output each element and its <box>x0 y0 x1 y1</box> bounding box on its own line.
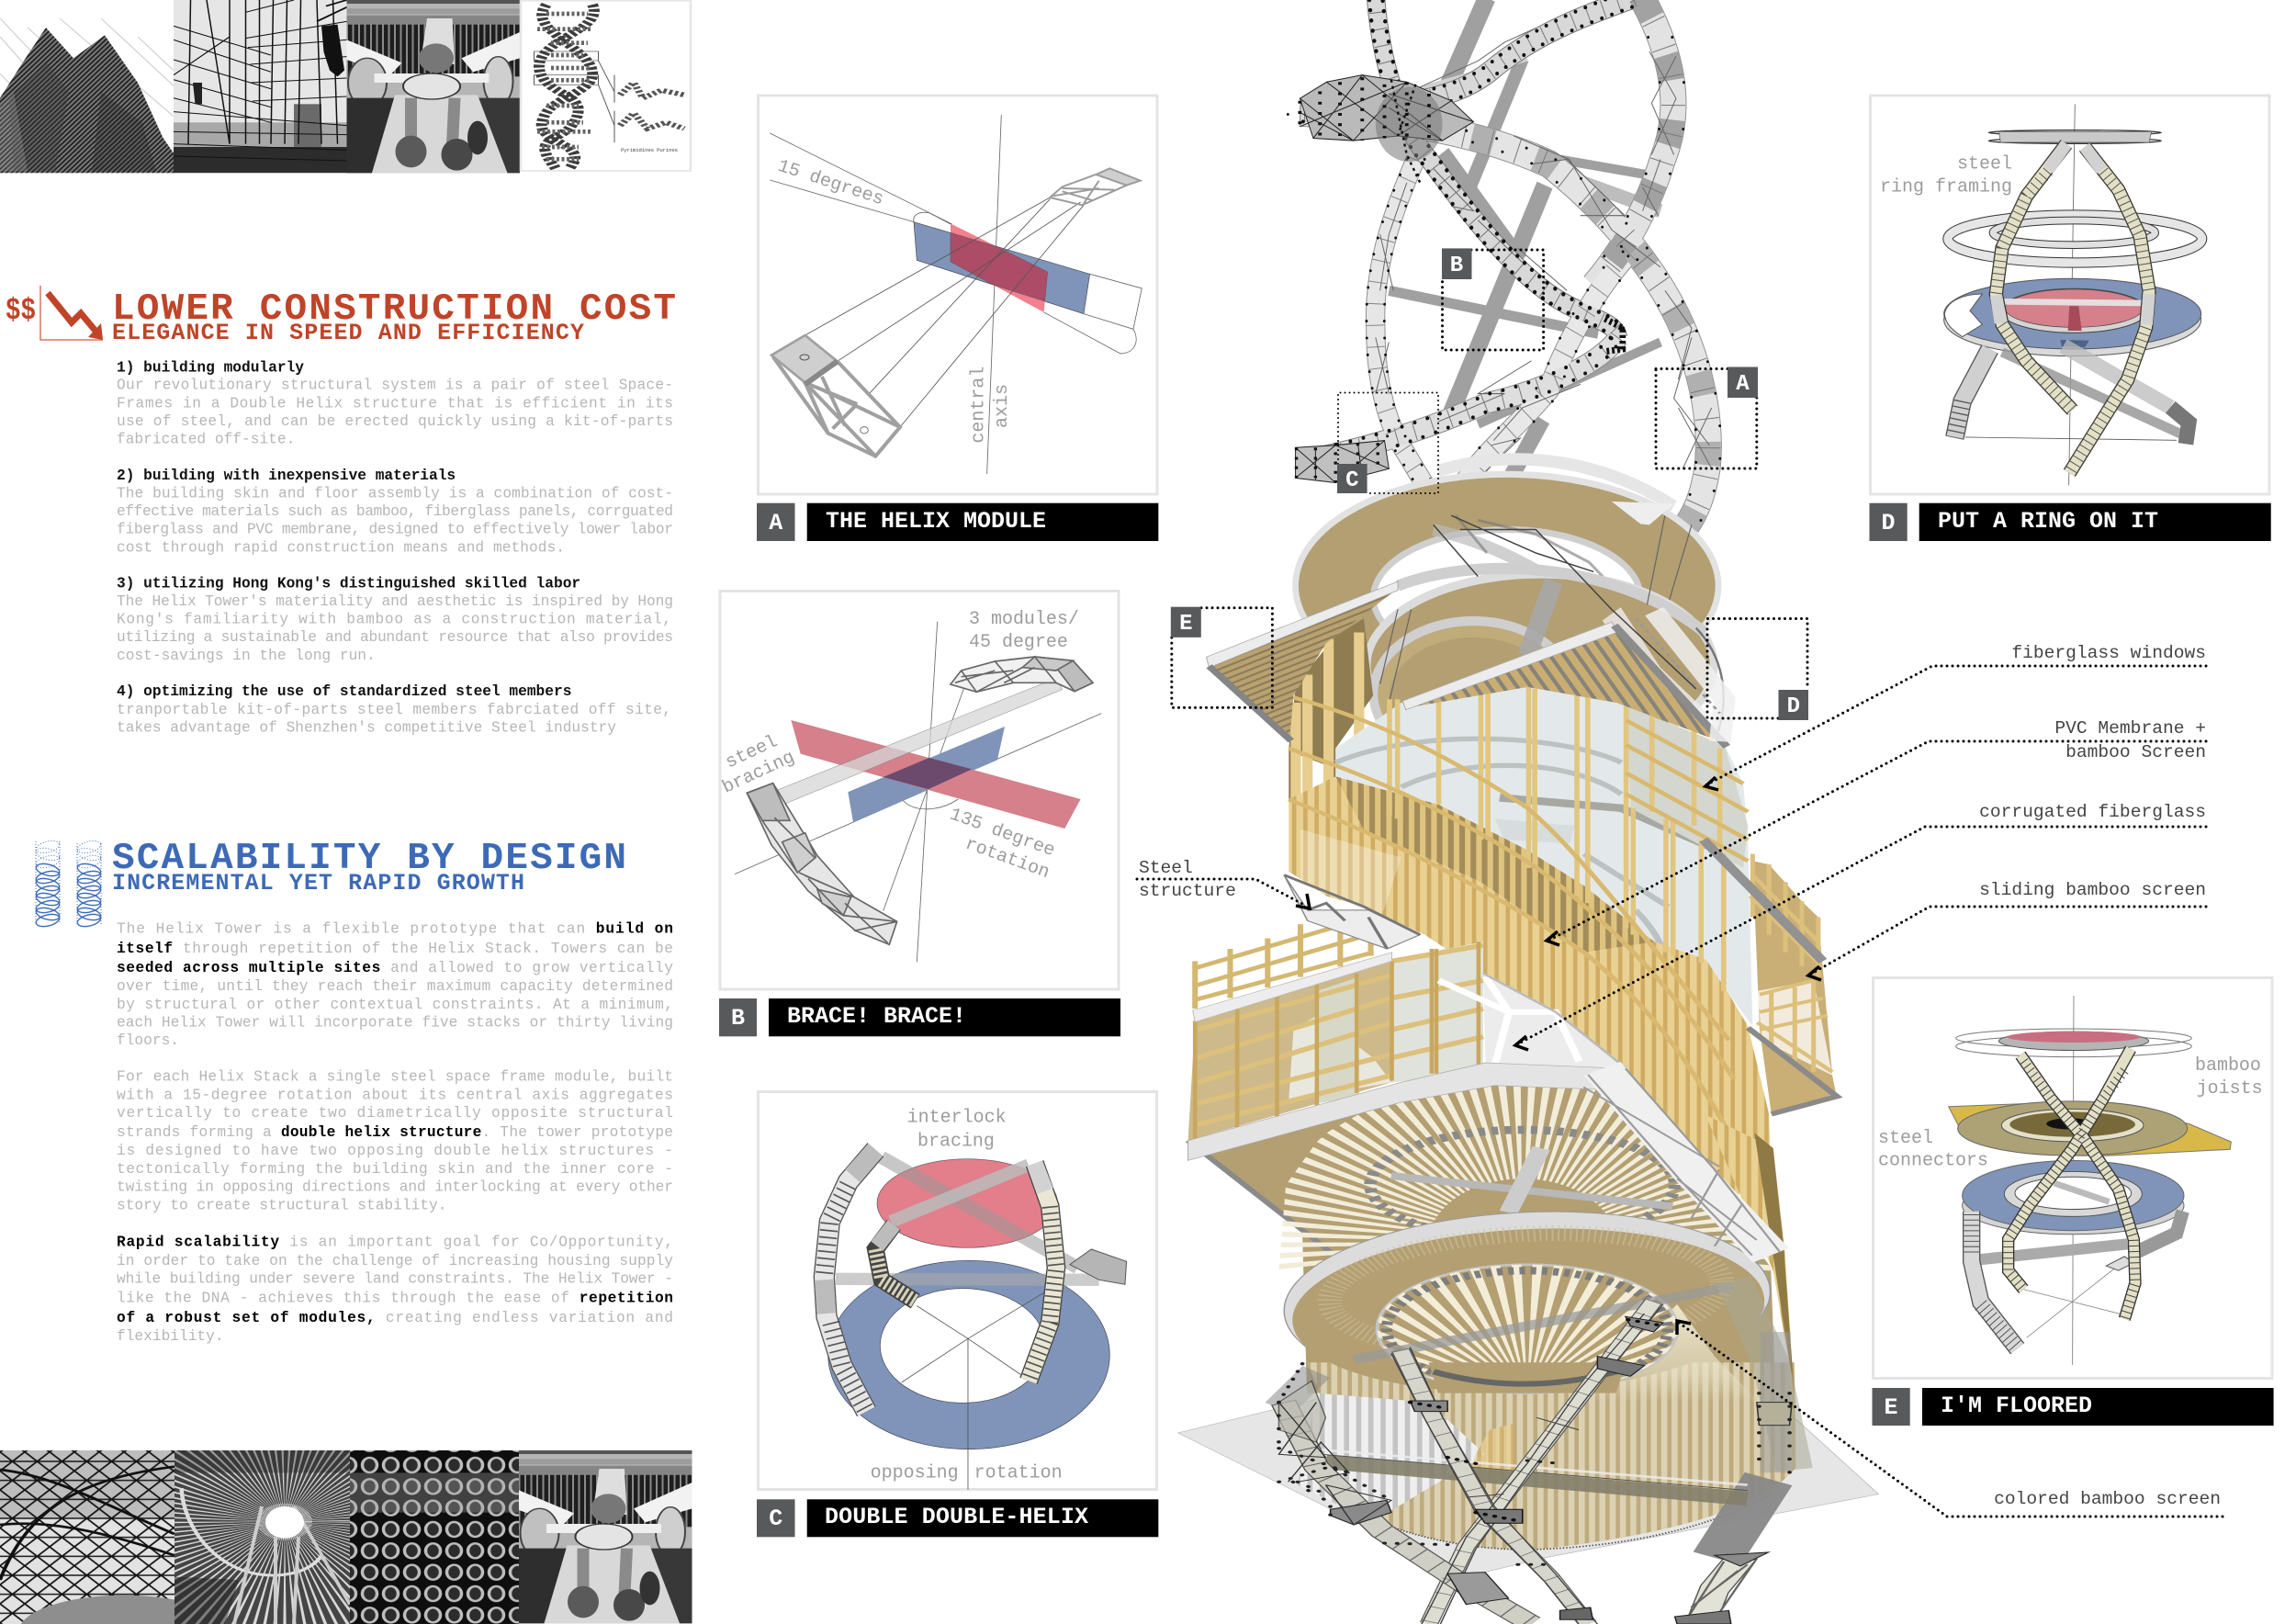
label D: PUT A RING ON IT <box>1938 508 2158 535</box>
callout: colored bamboo screen: colored bamboo screen <box>1994 1489 2221 1509</box>
annotations <box>775 156 1013 444</box>
annotations: joists <box>2197 1078 2263 1100</box>
text block: cost points: 4) optimizing the use of standardized steel members <box>117 683 571 700</box>
tan floor underside <box>1187 1068 1775 1393</box>
steel beams <box>1389 0 1660 480</box>
annotations: steel <box>1878 1128 1933 1149</box>
gray lower strand <box>1972 1212 2183 1348</box>
callout: corrugated fiberglass <box>1515 802 2206 1050</box>
annotations: connectors <box>1878 1150 1988 1171</box>
text block: cost points: utilizing a sustainable and abundant resource that also provides <box>117 629 673 646</box>
label A: THE HELIX MODULE <box>826 508 1046 535</box>
right balcony <box>1704 840 1837 1114</box>
text block: scalability: in order to take on the challenge of increasing housing supply <box>117 1253 673 1269</box>
text block: cost points: use of steel, and can be erected quickly using a kit-of-parts <box>117 413 673 430</box>
photo: steel pipe machinery repeat <box>519 1450 692 1623</box>
bamboo joist floor <box>1949 1101 2231 1156</box>
callout box A: A <box>1736 372 1750 397</box>
blue floor <box>1963 1161 2184 1235</box>
node dots <box>1288 0 1720 571</box>
label C <box>757 1499 1158 1537</box>
white steel truss <box>1583 1068 1780 1256</box>
label E: E <box>1884 1394 1898 1421</box>
text block: cost points: tranportable kit-of-parts steel members fabrciated off site, <box>117 702 671 718</box>
text block: scalability: while building under severe land constraints. The Helix Tower - <box>117 1270 673 1287</box>
annotations: ring framing <box>1880 176 2012 197</box>
text block: cost points: 2) building with inexpensive materials <box>117 468 456 484</box>
annotations <box>1878 1055 2263 1171</box>
text block: scalability: story to create structural stability. <box>117 1198 446 1214</box>
helix strands <box>1300 0 1708 571</box>
annotations: opposing <box>871 1462 959 1483</box>
callout box E <box>1171 607 1272 707</box>
text block: scalability: flexibility. <box>117 1328 224 1345</box>
annotations: rotation <box>974 1462 1063 1483</box>
photo: bamboo dome interior <box>174 1450 350 1624</box>
top photo strip: Pyrimidines Purines <box>621 147 678 153</box>
cream strands <box>1996 144 2149 473</box>
strand: left <box>824 1150 875 1412</box>
bamboo mullions <box>1390 687 1724 991</box>
strand: right <box>1029 1164 1056 1381</box>
balcony floor slab <box>1187 1063 1649 1160</box>
callout: steel structure: structure <box>1139 881 1236 901</box>
text block: scalability: each Helix Tower will incorporate five stacks or thirty living <box>117 1015 673 1032</box>
photo: bamboo scaffold towers <box>0 18 174 173</box>
text block: cost points: Kong's familiarity with bamboo as a construction material, <box>117 612 671 628</box>
second floor opening <box>1352 1263 1735 1394</box>
module: lower truss <box>771 335 900 457</box>
wire bracing <box>1376 28 1712 483</box>
label B: B <box>731 1005 745 1032</box>
back wall <box>1289 618 1373 808</box>
text block: scalability: is designed to have two opposing double helix structures - <box>117 1143 673 1159</box>
tower: main bamboo body and roof plates <box>1188 581 1837 1194</box>
callout box A <box>1656 367 1758 468</box>
text block: scalability: The Helix Tower is a flexible prototype that can build on <box>117 921 673 938</box>
text block: scalability: For each Helix Stack a single steel space frame module, built <box>117 1068 673 1085</box>
annotations: bamboo <box>2195 1055 2261 1077</box>
annotations: 45 degree <box>969 632 1068 653</box>
slat screen <box>1289 776 1772 1194</box>
bamboo curved rails <box>1289 697 1748 1170</box>
heading: lower construction cost: ELEGANCE IN SPEED AND EFFICIENCY <box>112 320 584 346</box>
callout: corrugated fiberglass: corrugated fiberglass <box>1979 802 2206 822</box>
label B: BRACE! BRACE! <box>787 1003 966 1030</box>
text block: scalability: seeded across multiple sites and allowed to grow vertically <box>117 960 673 976</box>
annotations: bracing <box>719 747 798 799</box>
annotations: bracing <box>917 1131 995 1152</box>
top photo strip <box>0 0 691 173</box>
annotations: central <box>969 367 990 444</box>
strand: inner <box>875 1224 916 1302</box>
left balcony <box>1188 875 1626 1141</box>
blue floor ring <box>1944 278 2201 356</box>
heading: scalability by design: SCALABILITY BY DESIGN <box>112 838 626 880</box>
text block: cost points: Frames in a Double Helix structure that is efficient in its <box>117 395 673 412</box>
heading: scalability by design: INCREMENTAL YET RAPID GROWTH <box>112 870 524 897</box>
callout box C <box>1337 393 1438 493</box>
callout box B: B <box>1450 254 1463 278</box>
diagram: floor assembly <box>1878 996 2263 1365</box>
tower: lower floor ribs and drum <box>1187 1063 1796 1624</box>
module blocks and nodes <box>1278 1316 1792 1624</box>
callout box D: D <box>1787 694 1800 719</box>
text block: scalability: of a robust set of modules, creating endless variation and <box>117 1310 673 1326</box>
text block: cost points: cost through rapid construction means and methods. <box>117 539 565 556</box>
lower steel modules <box>1278 1280 1795 1624</box>
text block: scalability <box>117 921 673 1345</box>
module: upper truss <box>1050 168 1141 205</box>
photo: steel pipe machinery <box>347 0 520 173</box>
panel E: I'm floored <box>1874 977 2272 1378</box>
text block: scalability: floors. <box>117 1032 179 1049</box>
cream crossing strands <box>2009 1049 2135 1319</box>
outer radial ribs <box>1349 1124 1696 1362</box>
text block: scalability: Rapid scalability is an important goal for Co/Opportunity, <box>117 1235 673 1251</box>
label A <box>757 503 1158 541</box>
panel D: put a ring on it <box>1870 96 2269 494</box>
icon: helix stacks <box>35 839 102 929</box>
ground plane <box>1178 1390 1879 1577</box>
module: lower curved truss <box>747 784 897 944</box>
text block: scalability: by structural or other contextual constraints. At a minimum, <box>117 997 673 1013</box>
right bamboo edge <box>1705 1114 1795 1393</box>
callout: steel structure <box>1137 858 1310 908</box>
panel C: double double-helix <box>759 1091 1157 1490</box>
callout: PVC membrane: PVC Membrane + <box>2054 718 2206 739</box>
tower: upper floor plates <box>1296 459 1724 766</box>
mid rings <box>1948 215 2202 263</box>
text block: cost points: The Helix Tower's materiality and aesthetic is inspired by Hong <box>117 593 673 610</box>
label C: C <box>769 1506 782 1532</box>
callout box E: E <box>1179 612 1193 637</box>
tower: upper steel helix <box>1288 0 1720 571</box>
left roof plate <box>1206 581 1398 740</box>
annotations: 15 degrees <box>775 156 886 210</box>
text block: scalability: with a 15-degree rotation about its central axis aggregates <box>117 1087 673 1103</box>
icon: falling cost chart: $$ <box>6 294 36 328</box>
diagram: bracing <box>719 609 1101 962</box>
annotations: steel <box>1957 153 2012 175</box>
label D <box>1870 503 2271 541</box>
text block: cost points: fabricated off-site. <box>117 432 295 448</box>
callout: PVC membrane <box>1547 718 2206 945</box>
callout: fiberglass windows <box>1705 643 2206 790</box>
text block: scalability: vertically to create two diametrically opposite structural <box>117 1105 673 1122</box>
panel B: brace brace <box>719 592 1119 989</box>
second floor disk <box>1273 1199 1782 1405</box>
annotations <box>719 609 1079 884</box>
callout: PVC membrane: bamboo Screen <box>2065 742 2206 762</box>
text block: cost points: Our revolutionary structural system is a pair of steel Space- <box>117 378 673 394</box>
dense module ends <box>1296 75 1623 483</box>
photo: stacked bamboo ends <box>350 1450 519 1624</box>
callout box C: C <box>1345 468 1359 493</box>
text block: cost points: 1) building modularly <box>117 359 304 376</box>
annotations: steel <box>723 731 782 773</box>
callout box B <box>1442 248 1544 350</box>
annotations <box>871 1108 1063 1483</box>
text block: scalability: like the DNA - achieves this through the ease of repetition <box>117 1291 673 1307</box>
label A: A <box>769 510 782 536</box>
annotations: 135 degree <box>947 805 1057 862</box>
panel A: the helix module <box>759 96 1157 494</box>
label C: DOUBLE DOUBLE-HELIX <box>825 1504 1088 1530</box>
text block: scalability: over time, until they reach their maximum capacity determined <box>117 978 673 995</box>
photo: scaffolding with worker <box>174 0 349 173</box>
glazing <box>1335 687 1752 1026</box>
gray lower beams <box>1954 346 2189 444</box>
callout: sliding bamboo screen: sliding bamboo screen <box>1979 880 2206 900</box>
callout box D <box>1707 619 1808 720</box>
diagram: helix module <box>770 115 1142 474</box>
top ring <box>1988 130 2161 143</box>
bottom photo strip <box>0 1450 692 1624</box>
label D: D <box>1881 510 1896 536</box>
heading: lower construction cost: LOWER CONSTRUCTION COST <box>112 288 676 331</box>
diagram: ring framing <box>1880 104 2202 485</box>
text block: scalability: strands forming a double helix structure. The tower prototype <box>117 1124 673 1141</box>
text block: cost points: cost-savings in the long run. <box>117 648 376 664</box>
label B <box>719 998 1120 1036</box>
icon: falling cost chart <box>6 286 103 340</box>
callout: colored bamboo screen <box>1677 1321 2223 1517</box>
diagram: interlocking helix <box>824 1108 1127 1490</box>
text block: cost points: effective materials such as bamboo, fiberglass panels, corrguated <box>117 503 673 520</box>
annotations: interlock <box>907 1108 1007 1129</box>
callout: sliding bamboo screen <box>1808 880 2206 980</box>
top disc <box>1956 1029 2191 1057</box>
text block: cost points: The building skin and floor assembly is a combination of cost- <box>117 485 673 502</box>
annotations <box>1880 153 2012 197</box>
callout: steel structure: Steel <box>1139 858 1193 878</box>
text block: cost points: 3) utilizing Hong Kong's distinguished skilled labor <box>117 575 580 592</box>
photo: space frame roof <box>0 1450 174 1624</box>
text block: cost points <box>117 359 673 736</box>
module: upper truss <box>951 657 1093 692</box>
text block: scalability: twisting in opposing directions and interlocking at every other <box>117 1179 673 1196</box>
right roof plate <box>1402 612 1727 747</box>
panel: DNA diagram <box>521 1 691 171</box>
text block: cost points: fiberglass and PVC membrane, designed to effectively lower labor <box>117 522 673 538</box>
annotations: rotation <box>962 834 1052 884</box>
annotations: 3 modules/ <box>969 609 1079 630</box>
callout: fiberglass windows: fiberglass windows <box>2011 643 2206 663</box>
text block: scalability: tectonically forming the building skin and the inner core - <box>117 1161 673 1178</box>
text block: cost points: takes advantage of Shenzhen's competitive Steel industry <box>117 719 616 736</box>
label E: I'M FLOORED <box>1941 1393 2092 1419</box>
label E <box>1872 1388 2274 1426</box>
annotations: axis <box>992 384 1013 428</box>
drum <box>1307 1362 1796 1550</box>
text block: scalability: itself through repetition of the Helix Stack. Towers can be <box>117 941 673 957</box>
